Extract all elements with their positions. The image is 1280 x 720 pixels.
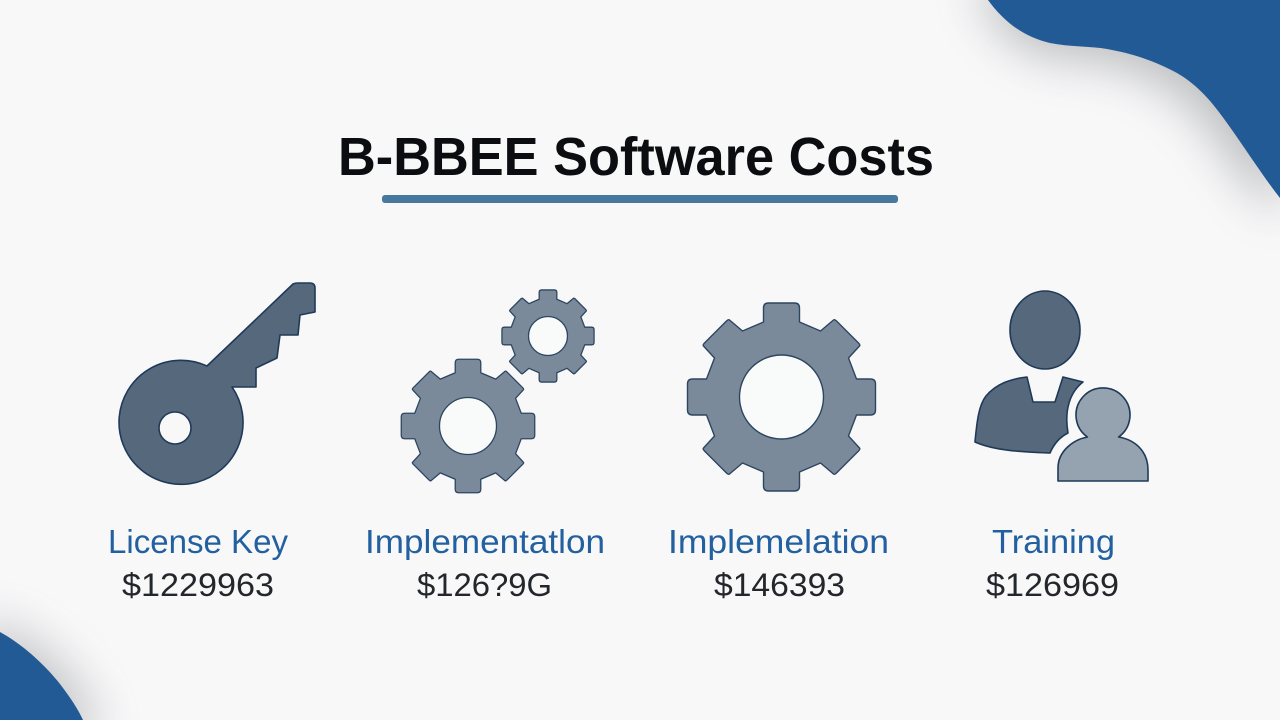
value: $1229963: [122, 567, 274, 603]
title underline: [382, 195, 898, 203]
large gear: [401, 359, 535, 493]
icon: pair of gears: [401, 290, 594, 493]
icon: trainer and trainee: [975, 291, 1148, 481]
item: training cost: [986, 523, 1119, 603]
label: Training: [992, 523, 1115, 560]
label: Implementatlon: [365, 523, 605, 560]
trainer head: [1010, 291, 1080, 369]
item: implemelation cost: [668, 523, 889, 603]
value: $126969: [986, 567, 1119, 603]
icon: key: [119, 283, 315, 484]
trainee figure: [1058, 388, 1148, 481]
item: implementation cost: [365, 523, 605, 603]
background blob: bottom left: [0, 618, 100, 720]
title: B-BBEE Software Costs: [338, 127, 934, 187]
background blob: top right: [975, 0, 1280, 215]
label: Implemelation: [668, 523, 889, 560]
label: License Key: [108, 523, 288, 560]
item: license key cost: [108, 523, 288, 603]
icon: single gear: [688, 303, 876, 491]
trainer body: [975, 377, 1083, 453]
value: $146393: [714, 567, 845, 603]
value: $126?9G: [417, 567, 552, 603]
small gear: [502, 290, 594, 382]
